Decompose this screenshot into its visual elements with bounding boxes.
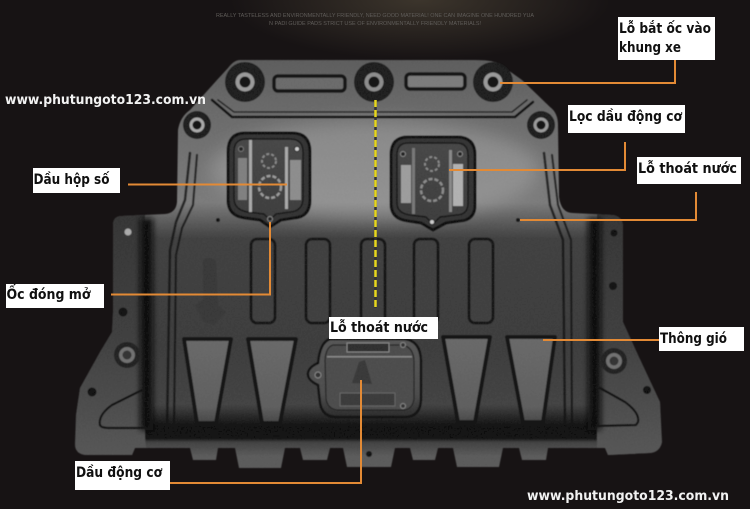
side ribs	[100, 153, 638, 428]
callout: Dầu hộp số	[33, 168, 287, 193]
callout: Lỗ bắt ốc vào khung xe	[500, 17, 715, 83]
website top: www.phutungoto123.com.vn	[5, 93, 206, 108]
website bottom: www.phutungoto123.com.vn	[527, 489, 729, 504]
surface grain	[75, 60, 662, 468]
callout: Thông gió: Thông gió	[660, 331, 727, 347]
callout: Lỗ thoát nước centre: Lỗ thoát nước	[330, 319, 428, 336]
callout: Lỗ thoát nước right	[520, 157, 741, 220]
embossed recess	[195, 258, 226, 325]
top caption: N PADI GUIDE PADS STRICT USE OF ENVIRONMENTALLY FRIENDLY MATERIALS!	[269, 21, 482, 27]
skid plate	[75, 60, 662, 468]
ventilation trapezoids	[184, 337, 555, 423]
left filter cover	[228, 133, 310, 227]
top caption: REALLY TASTELESS AND ENVIRONMENTALLY FRIENDLY, NEED GOOD MATERIAL! ONE CAN IMAGINE ONE HUNDRED YUA	[216, 13, 534, 19]
dark side strips	[140, 218, 601, 430]
mounting slots	[274, 74, 465, 91]
callout: Lọc dầu động cơ	[449, 105, 685, 170]
surface highlight	[210, 120, 540, 220]
callout: Ốc đóng mở	[6, 222, 270, 308]
side wings	[75, 214, 662, 455]
centre line	[374, 100, 377, 308]
callout: Dầu động cơ: Dầu động cơ	[76, 464, 162, 481]
callout: Lỗ thoát nước right: Lỗ thoát nước	[638, 160, 737, 177]
callout: Ốc đóng mở: Ốc đóng mở	[6, 283, 91, 303]
callout: Lọc dầu động cơ: Lọc dầu động cơ	[569, 108, 682, 125]
callout: Lỗ bắt ốc vào khung xe: khung xe	[619, 40, 681, 56]
callout: Dầu hộp số: Dầu hộp số	[34, 171, 110, 188]
callout: Lỗ bắt ốc vào khung xe: Lỗ bắt ốc vào	[619, 20, 711, 37]
right filter cover	[391, 137, 475, 230]
mounting bolts	[114, 62, 627, 374]
oil pan cover	[308, 339, 421, 417]
top channels	[212, 100, 533, 117]
small holes	[88, 218, 651, 457]
callout: Thông gió	[543, 327, 744, 351]
callout: Dầu động cơ	[75, 380, 361, 490]
plate body	[75, 60, 662, 468]
top caption	[216, 13, 534, 27]
drain slots	[251, 239, 493, 323]
